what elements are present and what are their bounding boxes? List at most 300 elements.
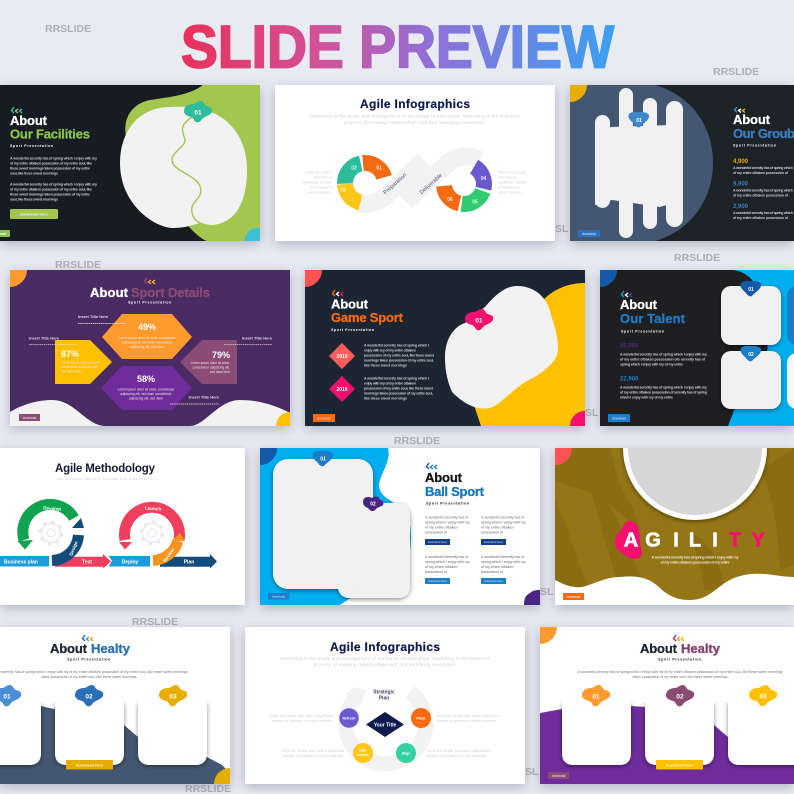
badge 01: [0, 685, 21, 706]
column text top-left: A wonderful serenity has of: [425, 516, 468, 520]
button: download: download: [552, 774, 566, 778]
heading: [733, 114, 794, 138]
icon: chevrons: [144, 278, 155, 284]
heading: About: [733, 112, 771, 127]
column text top-left: of my entire ofbaken: [425, 526, 458, 530]
button: [19, 414, 40, 421]
badge 01: 01: [194, 109, 202, 116]
arrow 87%: [55, 340, 112, 384]
image circle: [623, 376, 767, 520]
hexagon 58%: adipiscing elit, sed diam: [129, 396, 163, 400]
watermarks: RRSLIDE: [674, 252, 720, 264]
icon: chevrons: [622, 291, 632, 297]
body text: enjoy with my of my entire ofbaken: [364, 382, 416, 386]
corner blob: [245, 228, 260, 241]
arc: design: Design: [68, 540, 79, 556]
arc: develop: Develop: [43, 505, 61, 512]
purple base shape: [540, 706, 794, 784]
subheading: Sport Presentation: [426, 502, 470, 506]
heading: [10, 115, 90, 139]
subtitle: process of creating relationships with and satisfying customers.: [344, 120, 486, 126]
stat 2,900: [733, 204, 793, 220]
icon: chevrons: [12, 107, 22, 113]
diamond: Your Title: [374, 722, 397, 728]
body text: these sweet mornings taken possession of my entire: [10, 192, 90, 196]
wordmark: G: [645, 530, 661, 552]
diamond 2019: [329, 343, 355, 369]
stat 86,900: spring which I enjoy with my of my entire: [620, 362, 683, 366]
card 2: [338, 503, 410, 598]
green blob background: [125, 85, 260, 241]
arc: launch: [119, 505, 180, 550]
band: deploy: Deploy: [122, 560, 139, 566]
insert title labels: Insert Title Here: [242, 336, 273, 340]
right notes: There are people who have a significant: [436, 714, 500, 718]
band: deploy: [108, 556, 150, 566]
badge 01: 01: [748, 287, 754, 293]
body text: [364, 344, 435, 400]
heading: Game Sport: [331, 310, 404, 325]
caption: [652, 556, 738, 564]
column text bottom-right: of my entire ofbaken: [481, 565, 514, 569]
stat 86,900: [620, 344, 707, 366]
right notes: There are people who have a significant: [426, 749, 490, 753]
arc: launch: Launch: [145, 505, 162, 512]
node: align: Align: [402, 752, 410, 756]
wordmark: I: [712, 530, 718, 552]
body text: A wonderful serenity has of spring which I enjoy with my of my entire ofbaken possession of my entire soul, like these sweet mornings: [578, 670, 783, 674]
icon: chevrons: [674, 635, 684, 641]
column text bottom-left: of my entire ofbaken: [425, 565, 458, 569]
left notes: number of followers in every business.: [272, 719, 333, 723]
ring labels: [340, 166, 486, 206]
left note: There are people: [305, 170, 332, 174]
column text bottom-left: [425, 555, 470, 574]
insert title labels: Insert Title Here: [29, 336, 60, 340]
band labels: Preparation: [383, 172, 408, 196]
badge 02: [740, 346, 761, 361]
white waves: [10, 400, 290, 426]
body text: like these sweet mornings: [364, 396, 407, 400]
column text bottom-right: spring which I enjoy with my: [481, 560, 526, 564]
dark shape: [600, 270, 768, 426]
darker stripes: [555, 448, 794, 590]
body text: A wonderful serenity has of spring which I enjoy with my: [10, 182, 97, 186]
small buttons: Download Here: [484, 540, 504, 544]
badge 03: [159, 685, 187, 706]
heading: About: [10, 113, 48, 128]
watermarks: SL: [585, 407, 599, 419]
caption: of my entire ofbaken possession of my entire: [660, 560, 730, 564]
heading: [640, 641, 721, 656]
corner circle: [583, 253, 617, 287]
body text: [10, 156, 97, 202]
badge 02: [75, 685, 103, 706]
subheading: Sport Presentation: [331, 328, 375, 332]
left note: who have a: [314, 176, 332, 180]
node: align: [396, 743, 416, 763]
body text: A wonderful serenity has of spring which I: [364, 344, 429, 348]
corner blob: [524, 590, 540, 605]
badge 02: 02: [85, 693, 93, 700]
button: download: [612, 416, 626, 420]
diamond 2019 second: 2019: [336, 387, 348, 393]
badge 01: 01: [320, 456, 326, 462]
subheading: Sport Presentation: [658, 658, 702, 662]
body text: possession of my entire soul, like these sweet: [364, 354, 435, 358]
band: business plan: Business plan: [4, 560, 38, 566]
white wave: [555, 574, 794, 605]
card 2 front: [338, 503, 410, 598]
stat 2,900: A wonderful serenity has of spring which: [733, 211, 793, 215]
corner circles: [288, 253, 322, 287]
left note: of followers in: [310, 186, 332, 190]
tab: [0, 230, 10, 237]
card 2: [721, 351, 781, 409]
cards: [562, 702, 794, 765]
left notes: There are people who have a significant: [280, 749, 344, 753]
heading: About: [90, 285, 129, 300]
insert title labels: [29, 314, 273, 400]
button: [66, 760, 113, 770]
wordmark: Y: [751, 530, 765, 552]
stat 4,900: [733, 159, 793, 175]
panel: about our talent: [583, 253, 794, 426]
watermarks: RRSLIDE: [55, 259, 101, 271]
cards: [0, 702, 207, 765]
card 1: [273, 459, 373, 589]
grey cycle arrow: [345, 687, 426, 764]
body text: of my entire ofbaken possession of my entire soul, like: [10, 162, 92, 166]
diamond: [366, 712, 404, 737]
body text: possession of my entire soul, like these sweet: [364, 386, 434, 390]
body text: soul, like these sweet mornings: [10, 172, 58, 176]
left notes: [269, 714, 344, 758]
ring labels: 02: [351, 166, 357, 172]
button: [578, 230, 600, 237]
body text: A wonderful serenity has of spring which I enjoy with my: [10, 156, 97, 160]
button: [268, 593, 289, 600]
hexagon 49%: adipiscing elit, sed diam consetetuer: [121, 340, 174, 344]
arrow 79%: [180, 340, 237, 384]
button: [608, 414, 630, 422]
diamond 2019 second: [329, 376, 355, 402]
insert title labels: Insert Title Here: [189, 394, 220, 400]
subtitle: [280, 656, 490, 668]
band labels: [383, 174, 442, 194]
corner blob: [214, 768, 246, 794]
subtitle: Not everyone falls into success with their first try: [57, 477, 153, 481]
column text bottom-right: A wonderful serenity has of: [481, 555, 524, 559]
gear left: [40, 522, 62, 544]
body text: mornings taken possession of my entire soul,: [364, 392, 433, 396]
band: test: [55, 554, 111, 568]
stat 22,900: [619, 376, 707, 400]
arrow 79%: consetetuer adipiscing elit,: [192, 366, 230, 370]
heading: Agile Infographics: [330, 640, 440, 654]
node: information: [353, 743, 373, 763]
right notes: [426, 714, 500, 758]
badge 02: 02: [370, 502, 376, 508]
column text bottom-right: possession of: [481, 570, 503, 574]
right notes: number of followers in every business.: [436, 719, 497, 723]
badge 03: [749, 685, 777, 706]
subheading: Sport Presentation: [128, 300, 172, 304]
panel: agility: [538, 376, 794, 605]
watermarks: RRSLIDE: [45, 23, 91, 35]
column text bottom-left: possession of: [425, 570, 447, 574]
small buttons: Download Here: [428, 540, 448, 544]
ring labels: 04: [481, 176, 486, 182]
icon: chevrons: [332, 290, 343, 296]
band: plan: Plan: [184, 560, 194, 566]
hexagon 58%: adipiscing elit, sed diam consetetuer: [120, 392, 173, 396]
panel: about ball sport: [243, 431, 540, 605]
river line: [172, 117, 202, 224]
body text: taken possession of my entire soul, like these sweet mornings: [632, 675, 728, 679]
panel: agile infographics infinity: [275, 85, 555, 241]
arrow 79%: Lorem ipsum dolor sit amet,: [191, 361, 230, 365]
panel: about sport details: [4, 266, 296, 436]
badge 01: [465, 309, 493, 330]
body text: taken possession of my entire soul, like these sweet mornings: [42, 675, 137, 679]
stat 86,900: 86,900: [620, 344, 639, 350]
subheading: Sport Presentation: [733, 144, 777, 148]
panel: about healty blue: [0, 627, 246, 794]
heading: Healty: [91, 641, 131, 656]
body text: of my entire ofbaken possession of my entire soul, like: [10, 188, 92, 192]
badge 01: 01: [636, 118, 642, 124]
subheading: Sport Presentation: [67, 658, 111, 662]
heading: [50, 641, 131, 656]
ring labels: 03: [340, 188, 346, 194]
ring labels: 01: [376, 166, 382, 172]
arrow 79%: sed diam here: [210, 370, 230, 374]
insert title labels: Insert Title Here: [78, 314, 109, 319]
column text top-left: [425, 516, 470, 534]
badge 03: 03: [759, 693, 767, 700]
body text: soul, like these sweet mornings: [10, 198, 58, 202]
band: business plan: [0, 556, 49, 566]
stat 22,900: which I enjoy with my of my entire: [619, 396, 673, 400]
heading: Our Talent: [620, 311, 686, 326]
right note: every business.: [498, 190, 523, 194]
body text: enjoy with my of my entire ofbaken: [364, 348, 416, 352]
panel: about our facilities: [0, 85, 269, 252]
panel: agile infographics cycle: [245, 627, 525, 784]
watermarks: SL: [555, 223, 569, 235]
arrow 87%: 87%: [61, 349, 79, 359]
heading: Healty: [681, 641, 721, 656]
corner circle: [570, 85, 587, 102]
wordmark: [624, 530, 765, 552]
body text: A wonderful serenity has of spring which I: [364, 376, 429, 380]
stat 4,900: A wonderful serenity has of spring which: [733, 166, 793, 170]
body text: mornings taken possession of my entire soul,: [364, 358, 434, 362]
stat 9,900: of my entire ofbaken possession of: [733, 194, 789, 198]
button: download: [567, 595, 581, 599]
body text: these sweet mornings taken possession of my entire: [10, 166, 90, 170]
strategic plan: Strategic: [373, 690, 395, 696]
card 4: [787, 353, 794, 409]
icon: chevrons: [82, 635, 93, 641]
heading: About: [50, 641, 88, 656]
ring labels: 06: [447, 197, 453, 203]
caption: A wonderful serenity has of spring which I enjoy with my: [652, 556, 738, 560]
subtitle: Marketing is the study and management of exchange relationships. Marketing is the business: [280, 656, 490, 662]
heading: [425, 470, 485, 499]
button: download: [272, 594, 285, 598]
white image mask: [595, 88, 683, 238]
stat 86,900: A wonderful serenity has of spring which I enjoy with my: [620, 352, 707, 356]
node: information: Infor-: [359, 748, 368, 752]
blue-grey circle: [570, 85, 713, 241]
badge 01: [740, 281, 761, 296]
arrow 87%: Lorem ipsum dolor sit amet,: [61, 360, 100, 364]
column text top-right: possession of: [481, 530, 503, 534]
column text top-right: [481, 516, 526, 534]
heading: About: [331, 296, 369, 312]
heading: Our Facilities: [10, 126, 90, 142]
badge 03: 03: [169, 693, 177, 700]
watermarks: RRSLIDE: [132, 616, 178, 628]
panel: about game sport: [288, 253, 600, 441]
title: SLIDE PREVIEW: [181, 14, 614, 80]
wordmark: I: [673, 530, 679, 552]
infinity bands: [356, 157, 480, 204]
band: plan: [160, 554, 217, 568]
node: plans: Plans: [416, 716, 426, 720]
corner circle: [523, 610, 557, 644]
watermarks: RRSLIDE: [713, 66, 759, 78]
ring labels: 05: [472, 200, 478, 206]
small buttons: Download Here: [428, 579, 448, 583]
stat 9,900: [733, 182, 793, 198]
badge 01: [582, 685, 610, 706]
badge 01: [628, 112, 649, 127]
node: information: mation: [357, 753, 369, 757]
subheading: Sport Presentation: [10, 144, 54, 148]
body text: [578, 670, 783, 679]
panel: agile methodology: [0, 448, 245, 605]
watermarks: RRSLIDE: [394, 435, 440, 447]
gear right: [141, 522, 163, 544]
icon: chevrons: [426, 463, 437, 469]
small buttons: [425, 539, 506, 584]
right note: of followers in: [498, 186, 520, 190]
button: [10, 209, 58, 219]
diamond 2019: 2019: [336, 354, 348, 360]
column text top-right: spring which I enjoy with my: [481, 520, 526, 524]
dark base shape: [0, 705, 230, 784]
band: test: Test: [82, 560, 92, 566]
heading: [620, 297, 686, 326]
right note: There are people: [498, 170, 525, 174]
node: refresh: [339, 708, 359, 728]
arc: review: [153, 533, 185, 563]
corner circle: [243, 431, 277, 465]
button: download: [582, 232, 596, 236]
heading: About: [620, 297, 658, 312]
arc: develop: [18, 504, 74, 550]
heading: About: [425, 470, 463, 485]
card 3: [787, 286, 794, 345]
badge 01: 01: [3, 693, 11, 700]
badge 02: 02: [748, 352, 754, 358]
left note: [303, 170, 333, 194]
corner circle: [538, 431, 572, 465]
column text bottom-left: spring which I enjoy with my: [425, 560, 470, 564]
body text: like these sweet mornings: [364, 364, 407, 368]
node: plans: [411, 708, 431, 728]
subtitle: Marketing is the study and management of exchange relationships. Marketing is the business: [310, 114, 521, 120]
button: download: [23, 416, 37, 420]
column text top-left: spring which I enjoy with my: [425, 520, 470, 524]
left ring: [341, 159, 389, 207]
arrow 79%: 79%: [212, 350, 230, 360]
column text top-left: possession of: [425, 530, 447, 534]
wordmark: A: [624, 530, 638, 552]
badge 01: [184, 101, 212, 122]
badge 02: 02: [676, 693, 684, 700]
hexagon 49%: adipiscing elit, sed diam: [130, 345, 164, 349]
heading: [90, 287, 210, 300]
stat 4,900: of my entire ofbaken possession of: [733, 171, 789, 175]
stat 2,900: 2,900: [733, 204, 749, 210]
pink blob: [615, 521, 642, 559]
panel: about our groub: [553, 68, 794, 241]
strategic plan: [373, 690, 395, 702]
badge 01: [312, 451, 333, 466]
hexagon 58%: 58%: [137, 374, 155, 384]
right note: significant number: [498, 180, 528, 184]
column text bottom-left: A wonderful serenity has of: [425, 555, 468, 559]
left note: every business.: [307, 190, 332, 194]
watermarks: SL: [540, 586, 554, 598]
heading: [331, 296, 404, 325]
yellow shape: [474, 283, 585, 426]
heading: Agile Methodology: [55, 463, 156, 475]
stat 2,900: of my entire ofbaken possession of: [733, 216, 789, 220]
right note: [498, 170, 528, 194]
badge 02: [363, 497, 383, 511]
stat 22,900: of my entire ofbaken possession of serenity has of spring: [620, 390, 707, 394]
heading: Ball Sport: [425, 484, 485, 499]
card 1: [721, 286, 781, 345]
badge 01: 01: [475, 317, 483, 324]
small buttons: Download Here: [484, 579, 504, 583]
button: [313, 414, 335, 422]
tab: oad: [0, 232, 6, 236]
button: download: [548, 772, 569, 779]
stat 4,900: 4,900: [733, 159, 749, 165]
stat 22,900: 22,900: [620, 376, 639, 382]
left notes: There are people who have a significant: [269, 714, 333, 718]
right notes: number of followers in every business.: [426, 754, 487, 758]
subtitle: process of creating relationships with and satisfying customers.: [314, 662, 456, 668]
arc: review: Review: [162, 547, 176, 563]
panel: about healty purple: [523, 610, 794, 784]
subheading: Sport Presentation: [621, 330, 665, 334]
stat 9,900: A wonderful serenity has of spring which: [733, 188, 793, 192]
hexagon 49%: [102, 314, 192, 359]
button: Download Here: [76, 763, 103, 767]
corner blob: [276, 412, 304, 440]
white blob: [445, 286, 558, 409]
strategic plan: Plan: [379, 696, 389, 702]
left note: significant number: [303, 180, 333, 184]
button: download: [317, 416, 331, 420]
